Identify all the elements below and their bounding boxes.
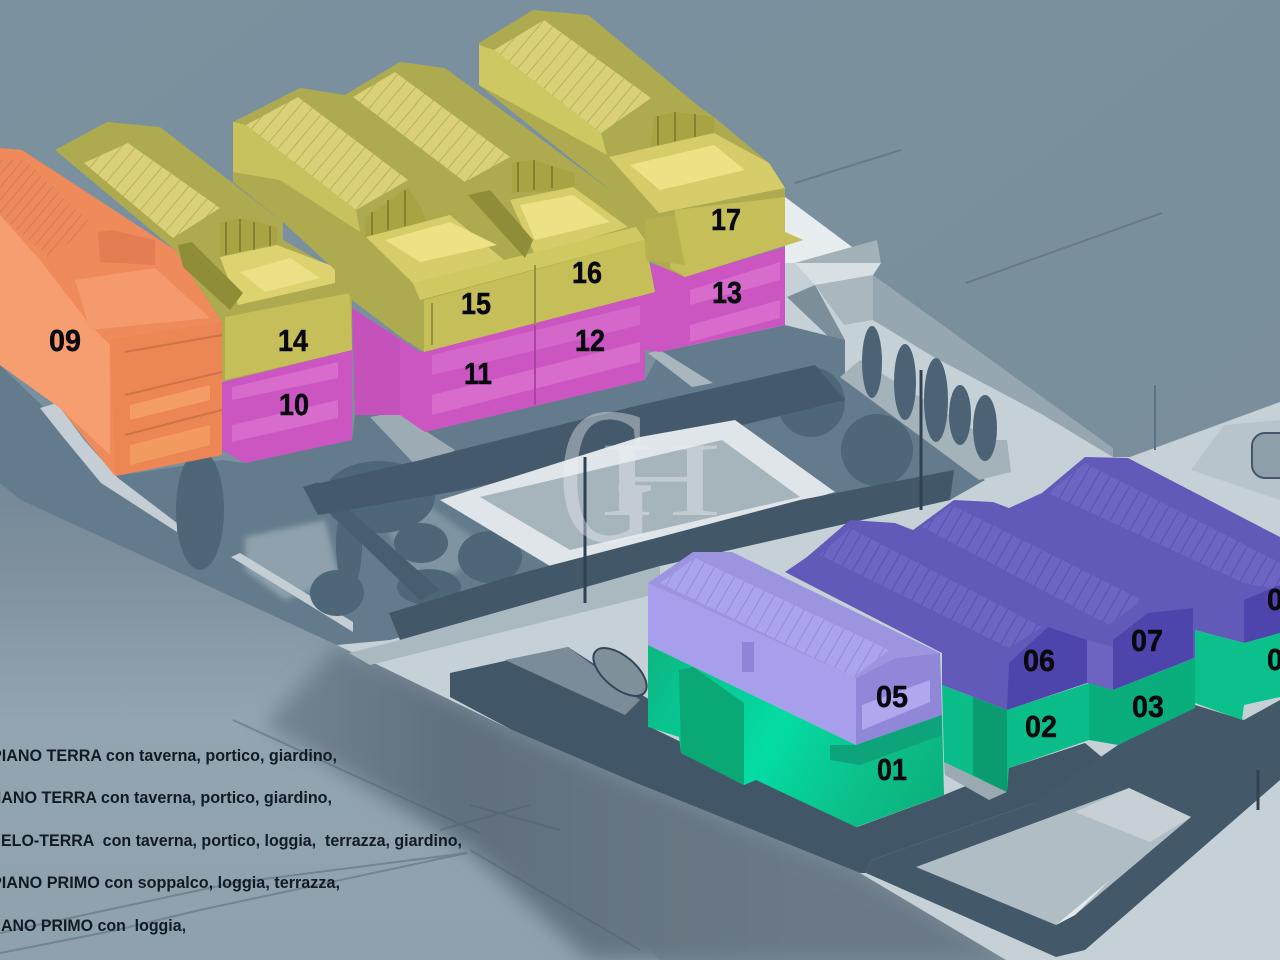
cypress trees	[862, 326, 997, 461]
unit 01 green	[648, 645, 944, 827]
label 02: 02	[1025, 709, 1057, 744]
north hedge band	[303, 365, 845, 515]
parking hedge	[450, 647, 1129, 873]
pool surround	[440, 420, 835, 572]
lamp posts	[585, 370, 1258, 810]
label 11: 11	[464, 356, 492, 391]
unit 10 magenta	[222, 350, 352, 463]
label 10: 10	[279, 387, 309, 422]
unit 04 green	[1195, 630, 1280, 720]
legend line 4: PIANO PRIMO con soppalco, loggia, terrazza,	[0, 874, 340, 892]
legend line 1: PIANO TERRA con taverna, portico, giardino,	[0, 747, 337, 765]
label 07: 07	[1131, 623, 1163, 658]
building block north	[0, 10, 803, 476]
left stairs	[40, 403, 177, 532]
units 11 12 magenta	[352, 292, 645, 432]
building block south	[648, 457, 1280, 827]
path below hedge	[349, 566, 660, 665]
hedge diagonal	[303, 482, 440, 600]
unit 03 green	[1089, 658, 1195, 745]
site plan base	[0, 197, 1280, 960]
small lit paths	[370, 412, 455, 470]
terrain lines	[0, 150, 1162, 953]
label 17: 17	[711, 202, 741, 237]
unit 05 light purple	[648, 552, 942, 745]
label 13: 13	[712, 275, 742, 310]
planter wall	[840, 360, 1011, 480]
unit number labels	[49, 202, 1280, 787]
trees in garden	[176, 367, 913, 616]
lower pool	[916, 788, 1191, 925]
lawn patches	[245, 520, 340, 600]
label 06: 06	[1023, 643, 1055, 678]
parking wall	[505, 647, 640, 715]
unit 13 magenta	[645, 247, 785, 352]
road strip	[265, 645, 1006, 960]
label 15: 15	[461, 286, 491, 321]
label 12: 12	[575, 323, 605, 358]
label 14: 14	[278, 323, 309, 358]
east hedge	[866, 700, 1280, 957]
plaza ramp	[1191, 420, 1280, 500]
units 15 16 yellow	[233, 62, 655, 352]
watermark logo: H	[600, 421, 722, 538]
lit court by unit 13	[785, 197, 852, 263]
right car	[1252, 433, 1280, 478]
retaining wall	[873, 275, 1113, 457]
watermark logo: G	[558, 368, 655, 584]
left car	[585, 639, 655, 705]
label 01: 01	[877, 752, 907, 787]
south hedge band	[389, 470, 954, 640]
upper railing wall	[795, 240, 881, 263]
unit 02 green	[942, 683, 1089, 792]
label 16: 16	[572, 255, 602, 290]
light ground	[337, 197, 1280, 960]
label 09: 09	[49, 323, 81, 358]
unit 09 orange	[0, 148, 222, 476]
label 05: 05	[876, 679, 908, 714]
light strip between blocks	[944, 762, 1007, 800]
units 06 07 08 purple	[785, 457, 1280, 710]
unit 17 yellow	[479, 10, 803, 277]
label 03: 03	[1132, 689, 1164, 724]
lower left ground	[0, 480, 660, 960]
legend text	[0, 747, 462, 935]
unit 14 yellow	[55, 122, 352, 382]
shaded garden	[0, 325, 985, 645]
pool water	[480, 440, 800, 550]
